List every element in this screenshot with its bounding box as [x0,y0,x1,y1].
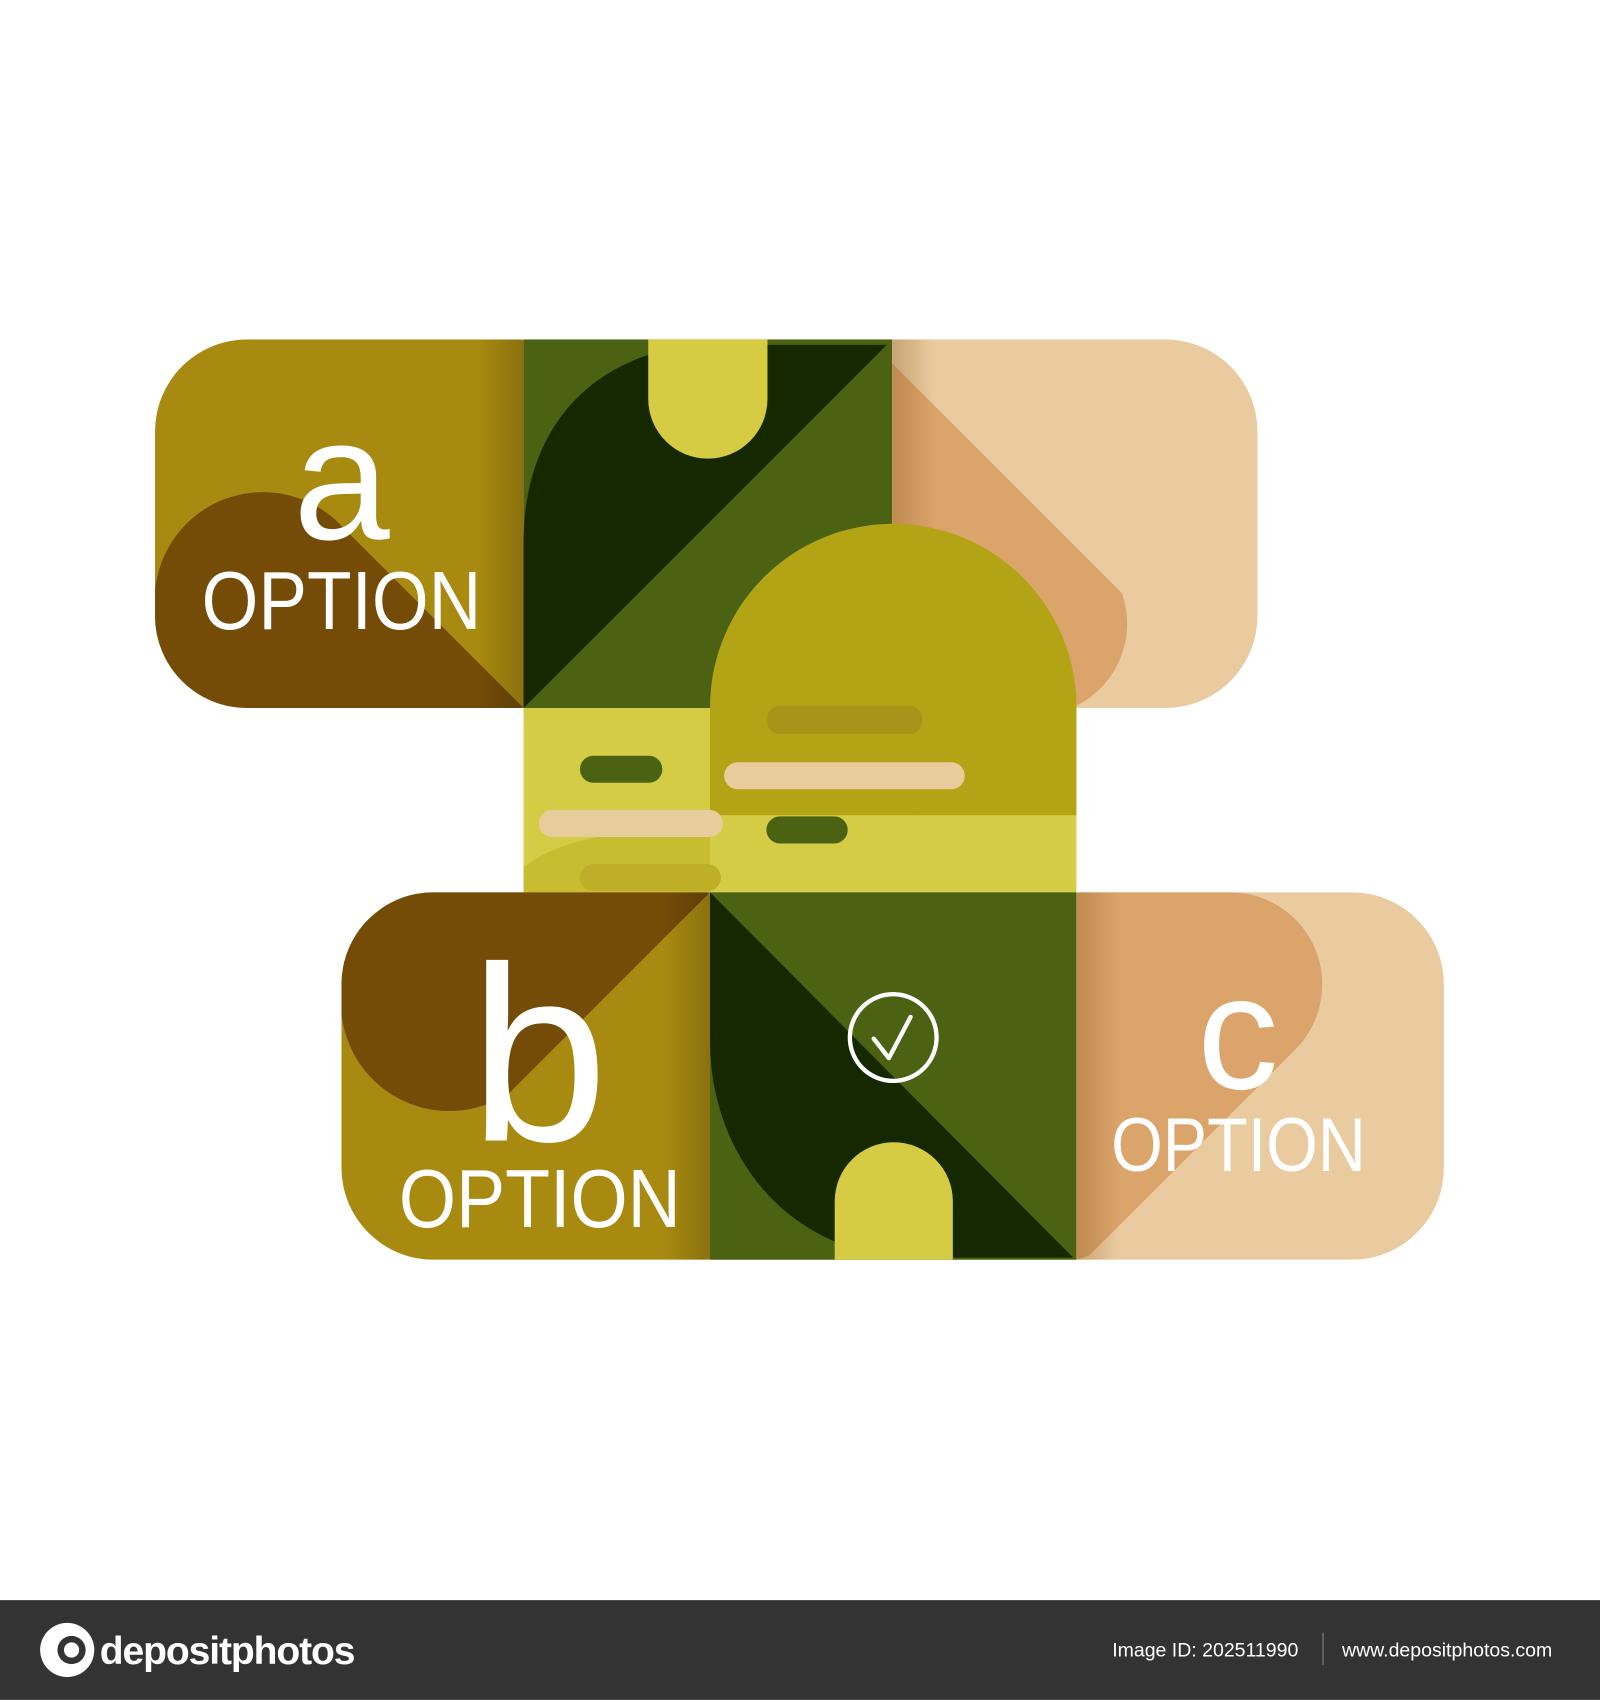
image id: Image ID: 202511990 [1112,1640,1298,1662]
icon: logo [40,1623,94,1677]
label OPTION a: OPTION [202,555,481,647]
pill: bottom yellow [835,1142,953,1260]
icon: check circle [850,994,937,1081]
letter c: c [1197,942,1279,1123]
label OPTION c: OPTION [1111,1103,1366,1188]
block: option c [1076,892,1444,1260]
block: option a [155,339,524,708]
pill: top yellow [648,339,767,459]
label OPTION b: OPTION [399,1153,681,1245]
dome [710,524,1076,892]
block: top right peach [892,339,1257,708]
block: option b [341,892,710,1260]
site url: www.depositphotos.com [1341,1640,1552,1662]
text bars left [580,756,662,783]
brand text: depositphotos [100,1630,355,1673]
panel: bottom center square [710,892,1076,1260]
letter b: b [469,915,608,1194]
letter a: a [293,382,390,576]
text bars right [766,706,922,734]
panel: top center square [524,339,892,708]
footer bar [0,1600,1600,1700]
panel: middle band [524,524,1076,892]
